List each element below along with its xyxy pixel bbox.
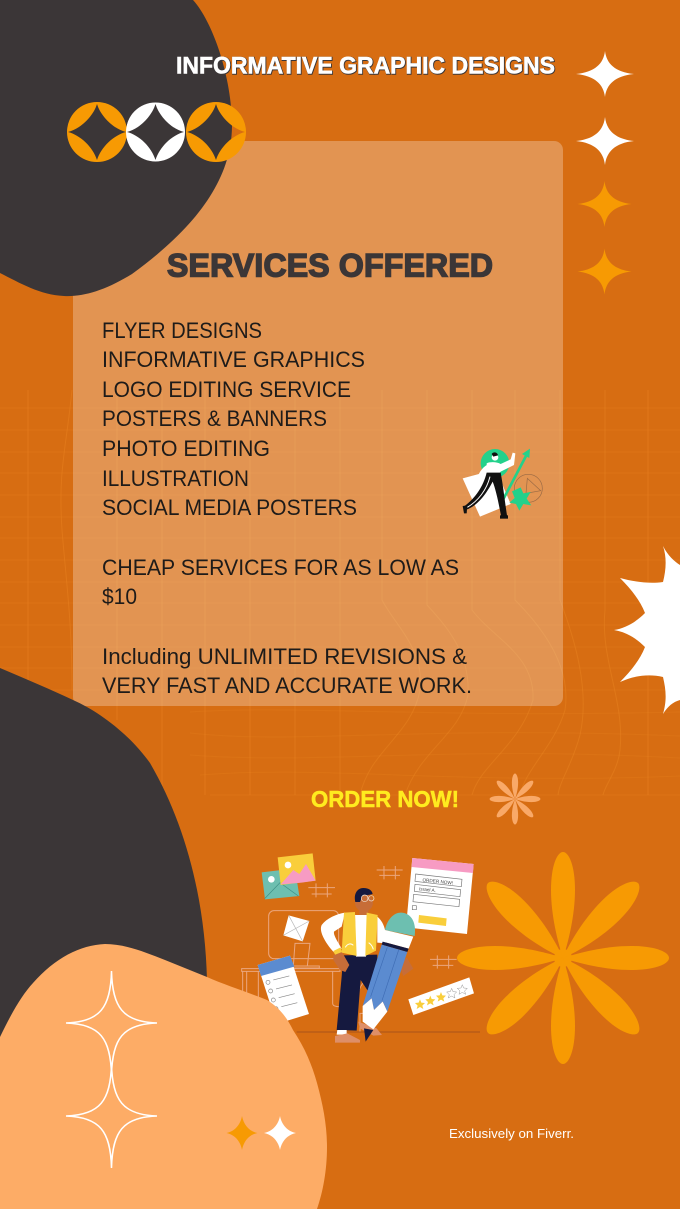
- icon: small orange sparkle: [226, 1116, 258, 1150]
- blob: peach shape: [0, 944, 327, 1209]
- revisions text: Including UNLIMITED REVISIONS &: [102, 644, 467, 669]
- icon: outlined sparkle stars: [66, 971, 157, 1168]
- services list: LOGO EDITING SERVICE: [102, 377, 351, 402]
- panel: services background: [73, 141, 563, 706]
- burst: white starburst shape: [614, 546, 680, 714]
- title: INFORMATIVE GRAPHIC DESIGNS: [176, 52, 555, 80]
- icon: three star circles: [67, 102, 246, 162]
- call to action: order now: ORDER NOW!: [311, 786, 459, 812]
- blob: top-left dark shape: [0, 0, 232, 296]
- services list: POSTERS & BANNERS: [102, 406, 327, 431]
- services list: FLYER DESIGNS: [102, 318, 262, 343]
- icon: checklist card: [258, 956, 309, 1024]
- services list: ILLUSTRATION: [102, 466, 249, 491]
- icon: order form: Israel A.: [419, 886, 436, 893]
- revisions text: VERY FAST AND ACCURATE WORK.: [102, 673, 472, 698]
- figure: man: [321, 888, 413, 1043]
- icon: column of sparkle stars: [576, 51, 634, 294]
- icon: small peach flower: [490, 774, 540, 824]
- icon: giant pencil: [363, 913, 415, 1042]
- services list: SOCIAL MEDIA POSTERS: [102, 495, 357, 520]
- title: INFORMATIVE GRAPHIC DESIGNS: [176, 53, 556, 80]
- pricing text: [102, 555, 459, 609]
- pricing text: CHEAP SERVICES FOR AS LOW AS: [102, 555, 459, 580]
- icon: star rating card: [408, 977, 474, 1015]
- illustration: small figure with arrow: [463, 449, 542, 519]
- blob: lower-left dark shape: [0, 668, 207, 1110]
- icon: overlapping photos: [262, 853, 316, 899]
- footer note: Exclusively on Fiverr.: [449, 1126, 574, 1141]
- services list: PHOTO EDITING: [102, 436, 270, 461]
- icon: small white sparkle: [264, 1116, 296, 1150]
- pricing text: $10: [102, 584, 137, 609]
- icon: crossed image placeholder: [283, 915, 309, 941]
- services list: [102, 318, 365, 520]
- icon: order form: [406, 858, 474, 934]
- services list: INFORMATIVE GRAPHICS: [102, 347, 365, 372]
- icon: order form: ORDER NOW!: [422, 877, 453, 886]
- illustration: man with giant pencil: [242, 853, 480, 1043]
- revisions text: [102, 644, 472, 698]
- heading: services offered: SERVICES OFFERED: [167, 248, 493, 284]
- icon: large orange flower: [457, 852, 669, 1064]
